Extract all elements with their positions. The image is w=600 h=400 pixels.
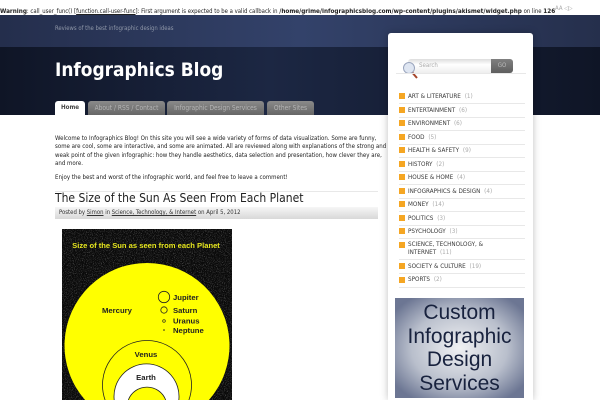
infographic: sun sizes: Earth <box>136 373 156 382</box>
infographic: sun sizes: Neptune <box>173 326 204 335</box>
category item <box>399 198 525 212</box>
category item: SOCIETY & CULTURE (19) <box>408 262 481 270</box>
search box: Search <box>419 62 438 69</box>
category item <box>399 239 525 260</box>
tagline: Reviews of the best infographic design ideas <box>55 26 174 32</box>
search button: GO <box>498 62 506 69</box>
category item <box>399 185 525 199</box>
site title: Infographics Blog <box>55 59 223 81</box>
category item <box>399 171 525 185</box>
intro text: and more. <box>55 160 83 167</box>
warning message: Warning: call_user_func() [function.call-user-func]: First argument is expected to be a valid callback in /home/grime/infographicsblog.com/wp-content/plugins/akismet/widget.php on line 126 <box>0 8 555 15</box>
tab: design services <box>167 101 264 115</box>
category item: INTERNET (11) <box>408 248 452 256</box>
search divider <box>396 73 526 74</box>
category item <box>399 274 525 288</box>
navigation tabs <box>55 101 314 115</box>
infographic: sun sizes: Jupiter <box>173 293 199 302</box>
header lower band <box>0 47 600 115</box>
infographic: sun sizes: Size of the Sun as seen from each Planet <box>72 241 220 250</box>
search box <box>408 59 491 73</box>
tab: home <box>55 101 85 115</box>
intro text: some are cool, some are interactive, and some are animated. All are reviewed along with explanations of the strong and <box>55 143 386 150</box>
category item <box>399 104 525 118</box>
category item <box>399 90 525 104</box>
category item: MONEY (14) <box>408 200 444 208</box>
category item: ART & LITERATURE (1) <box>408 92 473 100</box>
banner: custom design services: Services <box>419 372 500 395</box>
infographic: sun sizes: Venus <box>135 350 157 359</box>
category item: ENTERTAINMENT (6) <box>408 106 467 114</box>
category item: ENVIRONMENT (6) <box>408 120 462 126</box>
category item <box>399 225 525 239</box>
infographic: sun sizes: Saturn <box>173 306 198 315</box>
sidebar panel <box>388 33 533 400</box>
category item: FOOD (5) <box>408 134 436 140</box>
tab: other sites <box>267 101 314 115</box>
banner: custom design services <box>395 298 524 398</box>
tab: about <box>88 101 165 115</box>
post meta bar <box>55 207 378 219</box>
search button <box>491 59 513 73</box>
font size controls: AA ◁▷ <box>555 5 573 12</box>
category item <box>399 260 525 274</box>
post meta bar: Posted by Simon in Science, Technology, & Internet on April 5, 2012 <box>59 209 241 216</box>
tab: design services: Infographic Design Services <box>174 104 257 112</box>
category item <box>399 158 525 172</box>
header top band <box>0 15 600 47</box>
intro text <box>55 135 386 181</box>
intro text: Welcome to Infographics Blog! On this site you will see a wide variety of forms of data visualization. Some are funny, <box>55 135 377 142</box>
intro text: Enjoy the best and worst of the infographic world, and feel free to leave a comment! <box>55 174 288 181</box>
category item: SCIENCE, TECHNOLOGY, & <box>408 240 483 248</box>
category item <box>399 117 525 131</box>
category item: SPORTS (2) <box>408 276 442 283</box>
category item: HISTORY (2) <box>408 160 444 168</box>
infographic: sun sizes: Mercury <box>102 306 133 315</box>
category item: HOUSE & HOME (4) <box>408 174 465 180</box>
tab: other sites: Other Sites <box>274 104 307 112</box>
category item: POLITICS (3) <box>408 214 445 222</box>
tab: about: About / RSS / Contact <box>95 104 158 112</box>
category item <box>399 212 525 226</box>
banner: custom design services: Design <box>427 348 492 371</box>
tab: home: Home <box>61 104 79 111</box>
banner: custom design services: Infographic <box>408 325 511 348</box>
category item: PSYCHOLOGY (3) <box>408 228 458 234</box>
header background <box>0 15 600 115</box>
banner: custom design services: Custom <box>423 301 496 324</box>
category item: INFOGRAPHICS & DESIGN (4) <box>408 188 492 194</box>
category item: HEALTH & SAFETY (9) <box>408 146 471 154</box>
infographic: sun sizes: Uranus <box>173 316 200 326</box>
category item <box>399 144 525 158</box>
intro text: weak point of the given infographic: how they handle aesthetics, data selection and presentation, how clever they are, <box>55 152 382 159</box>
category item <box>399 131 525 145</box>
post title: The Size of the Sun As Seen From Each Planet <box>55 191 303 205</box>
category list <box>399 92 525 288</box>
infographic: sun sizes <box>62 229 232 400</box>
icon: magnifying glass <box>403 62 418 79</box>
